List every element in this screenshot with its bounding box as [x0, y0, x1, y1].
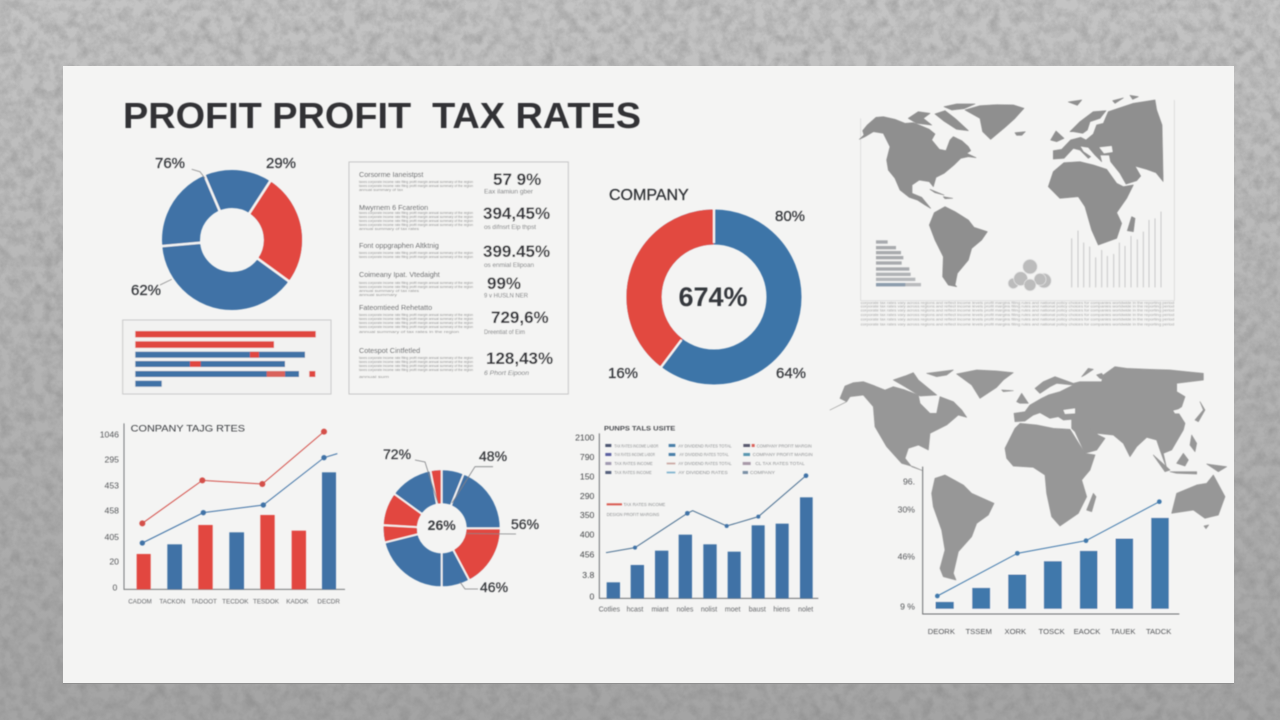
x axis labels — [599, 606, 813, 613]
map caption text: corporate tax rates vary across regions and reflect income levels profit margins filing rules and national policy choices for companies worldwide in the reporting period — [861, 313, 1175, 317]
x axis labels: CADOM — [128, 598, 152, 605]
y axis labels: 400 — [580, 529, 595, 539]
legend: COMPANY — [750, 470, 775, 475]
icon: coin stack — [1008, 259, 1051, 291]
x axis labels: TESDOK — [253, 598, 280, 605]
stat row 2: Mwyrnem 6 Fcaretion — [359, 203, 428, 212]
stat row 6: taxes corporate income rate filing profit margin annual summary of the region — [359, 368, 473, 372]
stat row 5: Dreentiat of Eim — [484, 329, 525, 336]
x axis labels: DECDR — [317, 598, 340, 605]
y axis labels: 458 — [105, 505, 119, 515]
statistics text panel — [349, 162, 568, 394]
x axis labels: TADCK — [1146, 627, 1172, 636]
y axis labels: 453 — [105, 481, 119, 491]
segmented donut chart: 56% — [511, 516, 539, 532]
x axis labels: TAUEK — [1111, 627, 1136, 636]
seas and lakes — [1063, 408, 1179, 414]
x axis labels: XORK — [1004, 627, 1027, 636]
top world map panel — [859, 95, 1175, 326]
large donut chart: company: 674% — [678, 282, 748, 312]
large donut chart: company — [608, 187, 806, 382]
stat row 2: taxes corporate income rate filing profit margin annual summary of the region — [359, 211, 473, 215]
bottom world map with bar chart — [830, 367, 1227, 636]
legend: COMPANY PROFIT MARGIN — [757, 443, 812, 448]
large donut chart: company: 16% — [608, 365, 638, 382]
stat row 5: taxes corporate income rate filing profit margin annual summary of the region — [359, 321, 473, 325]
legend: AY DIVIDEND RATES TOTAL — [678, 461, 732, 466]
y axis labels — [100, 430, 119, 592]
stat row 5: annual summary of tax rates in the region — [359, 330, 459, 334]
x axis labels: baust — [749, 606, 766, 613]
title: PROFIT PROFIT TAX RATES — [123, 95, 641, 136]
stat row 6: 128,43% — [486, 349, 553, 368]
stat row 2: taxes corporate income rate filing profit margin annual summary of the region — [359, 223, 473, 227]
stat row 5: taxes corporate income rate filing profit margin annual summary of the region — [359, 313, 473, 317]
stat row 2: 394,45% — [483, 204, 550, 223]
y axis labels: 350 — [580, 510, 595, 520]
legend: TAX RATES INCOME — [614, 461, 653, 466]
map caption text — [861, 301, 1175, 326]
large donut chart: company: COMPANY — [609, 187, 689, 204]
y axis labels: 30% — [898, 504, 915, 514]
x axis labels: DEORK — [928, 627, 956, 636]
stat row 1: taxes corporate income rate filing profit margin annual summary of the region — [359, 184, 473, 188]
legend: TAX RATES INCOME LABOR — [614, 443, 659, 448]
y axis labels: 0 — [113, 582, 118, 592]
y axis labels: 290 — [580, 491, 595, 501]
y axis labels: 96. — [903, 477, 915, 487]
x axis labels: hiens — [773, 606, 791, 613]
x axis labels: miant — [651, 606, 669, 613]
x axis labels: TOSCK — [1039, 627, 1066, 636]
stat row 2: os difnsrt Eip thpst — [484, 224, 536, 231]
paper panel — [63, 66, 1234, 684]
stat row 5: 729,6% — [491, 308, 549, 327]
stat row 2: annual summary of tax rates — [359, 227, 419, 231]
stat row 5: Fateomtieed Rehetatto — [359, 303, 432, 312]
donut chart: top left — [131, 155, 296, 299]
chart title: CONPANY TAJG RTES — [131, 424, 245, 434]
stat row 6: taxes corporate income rate filing profit margin annual summary of the region — [359, 360, 473, 364]
stat row 4: taxes corporate income rate filing profit margin annual summary of the region — [359, 281, 473, 285]
legend: DESIGN PROFIT MARGINS — [607, 512, 659, 517]
y axis labels — [575, 433, 595, 602]
stat row 4: 9 v HUSLN NER — [484, 292, 528, 300]
stat row 4 — [359, 270, 528, 300]
y axis labels: 150 — [580, 472, 595, 482]
segmented donut chart: 26% — [428, 517, 456, 533]
vertical tick chart — [1072, 212, 1161, 287]
x axis labels: nolist — [701, 606, 717, 613]
map: bottom world landmasses — [830, 367, 1227, 580]
stat row 2 — [359, 203, 550, 231]
stat row 3: taxes corporate income rate filing profit margin annual summary of the region — [359, 255, 473, 259]
stat row 6: 6 Phort Eipoon — [484, 370, 529, 377]
x axis labels — [928, 627, 1172, 636]
x axis labels: TECDOK — [222, 598, 249, 605]
stat row 1: 57 9% — [493, 170, 541, 189]
legend: AY DIVIDEND RATES TOTAL — [679, 452, 729, 457]
map caption text: corporate tax rates vary across regions and reflect income levels profit margins filing rules and national policy choices for companies worldwide in the reporting period — [861, 305, 1175, 309]
legend — [605, 443, 813, 517]
x axis labels — [128, 598, 340, 605]
stat row 4: 99% — [487, 274, 521, 293]
stat row 3 — [359, 241, 550, 269]
chart axes — [923, 467, 1179, 614]
segmented donut chart: 48% — [479, 448, 507, 464]
stat row 1: annual summary of tax — [359, 188, 403, 192]
legend: AY DIVIDEND RATES — [678, 470, 728, 475]
y axis labels: 46% — [898, 552, 915, 562]
segmented donut chart: 46% — [480, 579, 508, 595]
bars — [137, 472, 336, 589]
y axis labels: 405 — [105, 532, 119, 542]
y axis labels: 9 % — [900, 602, 915, 612]
y axis labels: 3.8 — [582, 570, 595, 580]
stat row 4: Coimeany Ipat. Vtedaight — [359, 270, 440, 279]
stat row 4: annual summary of tax rates — [359, 289, 419, 293]
y axis labels: 295 — [105, 455, 119, 465]
x axis labels: noles — [677, 606, 694, 613]
stat row 6: taxes corporate income rate filing profit margin annual summary of the region — [359, 356, 473, 360]
trend line — [606, 473, 808, 553]
segmented donut chart: 72% — [383, 446, 411, 462]
y axis labels — [898, 477, 915, 612]
x axis labels: KADOK — [286, 598, 309, 605]
stat row 6: taxes corporate income rate filing profit margin annual summary of the region — [359, 364, 473, 368]
x axis labels: moet — [725, 606, 740, 613]
x axis labels: nolet — [798, 606, 813, 613]
stat row 2: taxes corporate income rate filing profit margin annual summary of the region — [359, 215, 473, 219]
stat row 4: taxes corporate income rate filing profit margin annual summary of the region — [359, 285, 473, 289]
stat row 3: os enmial Elipoan — [484, 262, 534, 269]
map caption text: corporate tax rates vary across regions and reflect income levels profit margins filing rules and national policy choices for companies worldwide in the reporting period — [861, 309, 1175, 313]
legend: AY DIVIDEND RATES TOTAL — [678, 443, 732, 448]
stat row 6: Cotespot Cintfetled — [359, 346, 420, 355]
y axis labels: 2100 — [575, 433, 595, 443]
large donut chart: company: 64% — [776, 365, 806, 382]
stat row 3: taxes corporate income rate filing profit margin annual summary of the region — [359, 251, 473, 255]
stacked bar panel — [123, 320, 331, 394]
bars — [935, 517, 1169, 609]
map caption text: corporate tax rates vary across regions and reflect income levels profit margins filing rules and national policy choices for companies worldwide in the reporting period — [861, 301, 1175, 305]
donut chart: top left: 29% — [266, 155, 296, 172]
large donut chart: company: 80% — [775, 208, 805, 225]
segmented donut chart — [383, 446, 539, 595]
stat row 6 — [359, 346, 553, 379]
legend: TAX RATES INCOME — [623, 502, 665, 507]
x axis labels: EAOCK — [1074, 627, 1101, 636]
x axis labels: Cotlies — [599, 606, 621, 613]
bars — [607, 497, 813, 598]
stat row 5: taxes corporate income rate filing profit margin annual summary of the region — [359, 325, 473, 329]
blue trend line — [140, 454, 337, 546]
stat row 6: annual sum — [359, 375, 389, 379]
legend: TAX RATES INCOME — [614, 470, 652, 475]
map caption text: corporate tax rates vary across regions and reflect income levels profit margins filing rules and national policy choices for companies worldwide in the reporting period — [861, 317, 1175, 321]
y axis labels: 0 — [590, 592, 595, 602]
x axis labels: TADOOT — [191, 598, 217, 605]
chart title: PUNPS TALS USITE — [604, 425, 676, 432]
y axis labels: 456 — [580, 549, 595, 559]
red trend line — [139, 429, 327, 526]
legend: TAX RATES INCOME LABOR — [614, 452, 655, 457]
stat row 1: Corsorme Ianeistpst — [359, 170, 423, 179]
map: top world landmasses — [859, 95, 1163, 287]
y axis labels: 20 — [109, 556, 119, 566]
donut chart: top left: 62% — [131, 282, 161, 299]
y axis labels: 790 — [580, 452, 595, 462]
company tax rates combo chart — [100, 423, 345, 605]
stat row 3: Font oppgraphen Altktnig — [359, 241, 439, 250]
stat row 4: annual summary — [359, 293, 397, 297]
x axis labels: TACKON — [159, 598, 186, 605]
mini horizontal bars — [876, 240, 921, 286]
middle blue bar chart — [575, 425, 818, 613]
stat row 1: Eax ilamiun gber — [484, 188, 534, 196]
donut chart: top left: 76% — [155, 155, 185, 172]
stat row 5 — [359, 303, 549, 336]
trend line — [935, 499, 1162, 598]
legend: COMPANY PROFIT MARGIN — [753, 452, 813, 457]
y axis labels: 1046 — [100, 430, 119, 440]
black sea — [1099, 146, 1113, 153]
legend: CL TAX RATES TOTAL — [755, 461, 805, 466]
x axis labels: TSSEM — [965, 627, 992, 636]
stat row 1: taxes corporate income rate filing profit margin annual summary of the region — [359, 180, 473, 184]
x axis labels: hcast — [627, 606, 643, 613]
stat row 1 — [359, 170, 541, 196]
stat row 3: 399.45% — [483, 242, 550, 261]
stat row 5: taxes corporate income rate filing profit margin annual summary of the region — [359, 317, 473, 321]
map caption text: corporate tax rates vary across regions and reflect income levels profit margins filing rules and national policy choices for companies worldwide in the reporting period — [861, 322, 1175, 326]
stat row 2: taxes corporate income rate filing profit margin annual summary of the region — [359, 219, 473, 223]
